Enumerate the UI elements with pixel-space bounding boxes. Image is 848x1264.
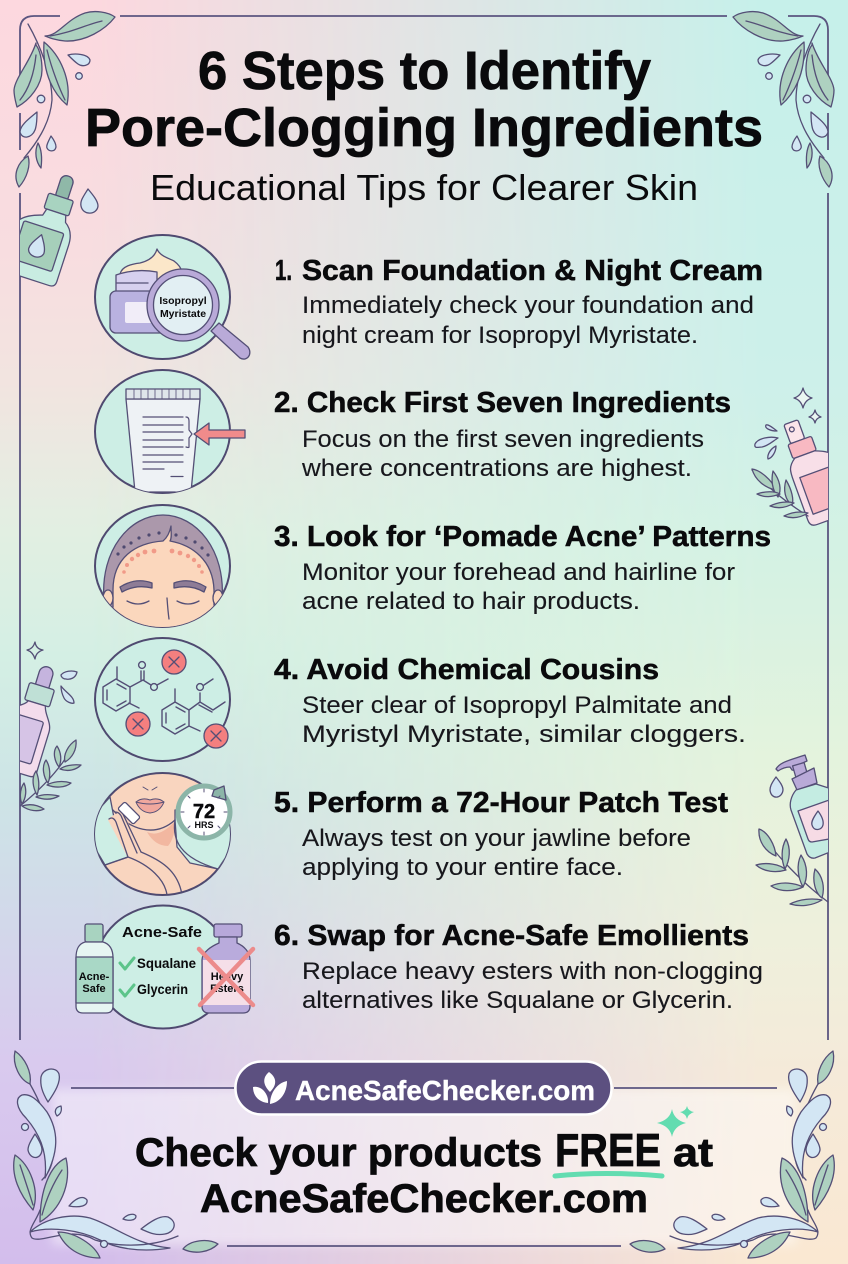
title — [85, 41, 763, 158]
icon: step 3 face with forehead acne — [95, 505, 230, 640]
icon: step 6 acne-safe list and bottles: Acne- — [79, 971, 110, 983]
decoration: pink dropper bottle left — [20, 666, 55, 778]
step 4 text: Myristyl Myristate, similar cloggers. — [302, 721, 746, 748]
decoration: top-right leaves and drops — [733, 12, 834, 187]
title: Pore-Clogging Ingredients — [85, 98, 763, 158]
step 5 text — [274, 787, 728, 881]
decoration: dropper bottle top left — [20, 175, 74, 287]
decoration: sparkle and drops left — [27, 642, 77, 703]
icon: step 6 acne-safe list and bottles: Esters — [210, 983, 244, 995]
call to action: FREE — [555, 1124, 661, 1176]
decoration: bottom-right water and leaves — [630, 1051, 834, 1258]
sparkles — [657, 1106, 694, 1137]
step 1 text: Scan Foundation & Night Cream — [302, 255, 763, 287]
FREE underline — [555, 1174, 662, 1176]
subtitle: Educational Tips for Clearer Skin — [150, 167, 698, 208]
step 4 text: Steer clear of Isopropyl Palmitate and — [302, 692, 732, 719]
step 6 text: alternatives like Squalane or Glycerin. — [302, 987, 733, 1014]
icon: step 5 patch test and 72 hour timer: HRS — [194, 820, 214, 830]
website pill badge: AcneSafeChecker.com — [295, 1075, 595, 1106]
step 2 text: 2. Check First Seven Ingredients — [274, 387, 731, 419]
icon: step 6 acne-safe list and bottles: Glycerin — [137, 981, 188, 997]
icon: step 2 tube with arrow — [95, 370, 245, 493]
decoration: sparkles and spray droplets right — [755, 388, 821, 459]
title: 6 Steps to Identify — [198, 41, 651, 101]
step 3 text: acne related to hair products. — [302, 588, 640, 615]
icon: step 1 jar and magnifier — [95, 235, 250, 359]
decoration: top-left leaves and drops — [14, 12, 115, 187]
icon: step 6 acne-safe list and bottles: Heavy — [211, 971, 244, 983]
icon: step 1 jar and magnifier: Myristate — [160, 308, 206, 320]
step 3 text: Monitor your forehead and hairline for — [302, 559, 735, 586]
step 6 text: 6. Swap for Acne-Safe Emollients — [274, 920, 749, 952]
decoration: spray bottle right — [784, 420, 828, 526]
decoration: leaf branch right upper — [752, 469, 808, 518]
call to action: Check your products — [135, 1131, 542, 1175]
icon: step 6 acne-safe list and bottles: Squalane — [137, 955, 196, 971]
call to action: AcneSafeChecker.com — [200, 1177, 648, 1221]
icon: step 5 patch test and 72 hour timer — [92, 773, 235, 895]
step 2 text: where concentrations are highest. — [301, 455, 692, 482]
step 1 text: 1. — [275, 255, 292, 287]
icon: step 4 molecules crossed out — [95, 638, 230, 761]
step 3 text: 3. Look for ‘Pomade Acne’ Patterns — [274, 521, 771, 553]
decoration: leaf branch left — [20, 740, 81, 811]
step 5 text: Always test on your jawline before — [302, 825, 691, 852]
icon: step 6 acne-safe list and bottles: Safe — [82, 983, 106, 995]
icon: water drop — [81, 189, 98, 213]
step 3 text — [274, 521, 771, 615]
step 1 text — [275, 255, 763, 349]
step 1 text: Immediately check your foundation and — [302, 292, 754, 319]
decoration: bottom-left water and leaves — [14, 1051, 218, 1258]
step 4 text — [274, 654, 746, 748]
step 5 text: 5. Perform a 72-Hour Patch Test — [274, 787, 728, 819]
icon: step 6 acne-safe list and bottles: Acne-Safe — [122, 924, 202, 941]
icon: step 1 jar and magnifier: Isopropyl — [159, 295, 207, 307]
step 2 text — [274, 387, 731, 482]
icon: step 6 acne-safe list and bottles — [76, 906, 253, 1028]
step 6 text: Replace heavy esters with non-clogging — [302, 958, 763, 985]
step 1 text: night cream for Isopropyl Myristate. — [302, 322, 698, 349]
icon: step 5 patch test and 72 hour timer: 72 — [193, 801, 215, 823]
decoration: pump bottle right — [770, 755, 835, 858]
icon: white leaf logo — [253, 1072, 287, 1104]
step 2 text: Focus on the first seven ingredients — [302, 426, 704, 453]
step 5 text: applying to your entire face. — [302, 854, 623, 881]
call to action: at — [673, 1131, 713, 1175]
decoration: leaf branch right lower — [756, 829, 828, 906]
step 6 text — [274, 920, 763, 1014]
call to action — [135, 1124, 713, 1221]
step 4 text: 4. Avoid Chemical Cousins — [274, 654, 659, 686]
website pill badge — [236, 1062, 612, 1114]
footer glow panel — [52, 1089, 796, 1245]
